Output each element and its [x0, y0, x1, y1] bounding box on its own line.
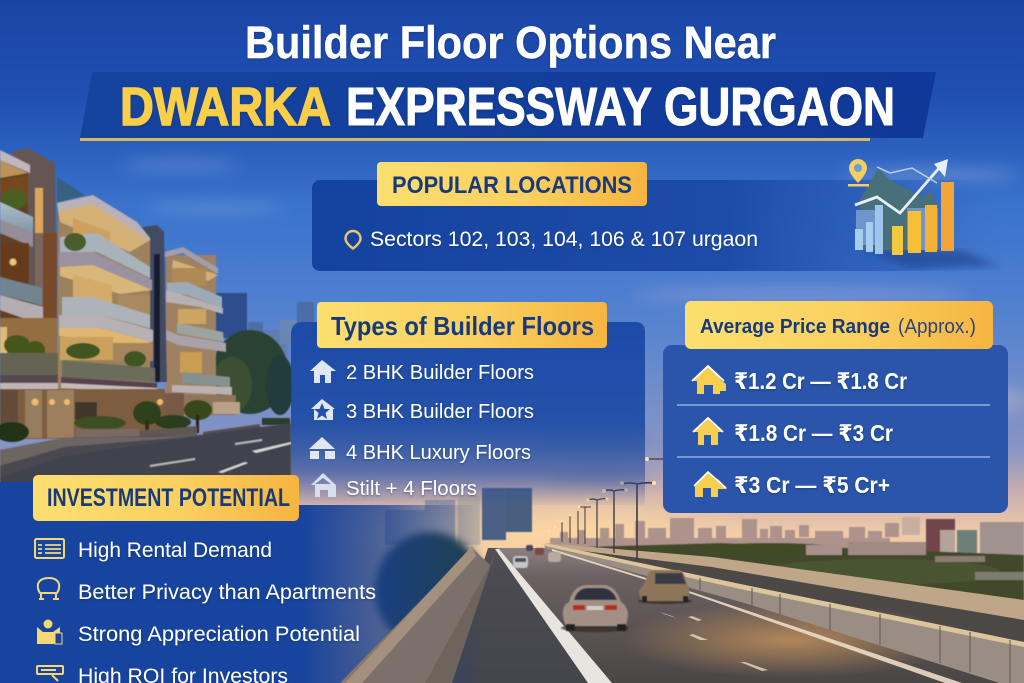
distant towers behind building [210, 293, 314, 362]
title [80, 17, 936, 141]
photo: city skyline [385, 488, 1024, 605]
item: rental: High Rental Demand [78, 539, 272, 562]
item: appreciation: Strong Appreciation Potential [78, 623, 360, 646]
location text: Sectors 102, 103, 104, 106 & 107 urgaon [370, 228, 758, 251]
panel: average price range [663, 301, 1008, 513]
title line 1: Builder Floor Options Near [245, 17, 776, 68]
heading tag: POPULAR LOCATIONS [392, 172, 632, 199]
panel: types of builder floors [291, 302, 645, 505]
item: 3 BHK: 3 BHK Builder Floors [346, 401, 534, 423]
title banner [80, 72, 936, 141]
middle wing [57, 195, 157, 395]
panel: popular locations [312, 162, 1002, 271]
parapet on the left of the road [340, 546, 496, 683]
heading tag: INVESTMENT POTENTIAL [47, 484, 290, 512]
left unit [0, 150, 60, 389]
dark trees beside the road [375, 532, 485, 648]
photo: left street [0, 423, 291, 490]
row: price 1: ₹1.2 Cr — ₹1.8 Cr [734, 368, 907, 394]
item: 4 BHK [309, 437, 531, 464]
heading tag: Average Price Range [700, 316, 890, 338]
dark pillar [138, 225, 167, 382]
car: near silver sedan [561, 585, 629, 632]
heading tag: Types of Builder Floors [331, 311, 594, 341]
row: price 2: ₹1.8 Cr — ₹3 Cr [734, 420, 893, 446]
heading tag [377, 162, 647, 206]
heading tag [33, 475, 299, 521]
car: gold hatchback [638, 570, 692, 604]
near barrier [545, 543, 1024, 683]
cars on the road [513, 545, 692, 632]
stone pillar [10, 148, 57, 327]
panel: investment backdrop [0, 482, 485, 683]
item: 4 BHK: 4 BHK Luxury Floors [346, 442, 531, 464]
far barrier [545, 543, 1024, 620]
photo: apartment building [0, 148, 290, 442]
row: price 2 [693, 418, 893, 446]
chart icon [848, 159, 1000, 268]
item: Stilt + 4: Stilt + 4 Floors [346, 478, 477, 500]
heading tag [317, 302, 607, 348]
row: price 3: ₹3 Cr — ₹5 Cr+ [734, 472, 890, 498]
title banner: EXPRESSWAY [346, 77, 652, 137]
item: 2 BHK: 2 BHK Builder Floors [346, 362, 534, 384]
road surface [445, 548, 1000, 683]
distant cars [513, 545, 561, 568]
teal roof [57, 177, 85, 203]
heading tag [685, 301, 993, 349]
hazy towers under the types panel [385, 488, 532, 545]
row: price 1 [692, 366, 907, 394]
title banner: DWARKA [120, 77, 331, 137]
right wing [160, 247, 236, 418]
icon: location pin [346, 231, 360, 248]
road lines [495, 549, 612, 683]
item: privacy: Better Privacy than Apartments [78, 581, 376, 604]
street lights [548, 457, 663, 560]
ground floor [0, 389, 290, 442]
item: Stilt + 4 [311, 473, 477, 500]
photo: expressway [445, 543, 1024, 683]
panel: investment potential [33, 475, 376, 683]
title banner: GURGAON [664, 77, 895, 137]
trees behind the building [212, 330, 294, 415]
heading tag: (Approx.) [898, 316, 976, 338]
